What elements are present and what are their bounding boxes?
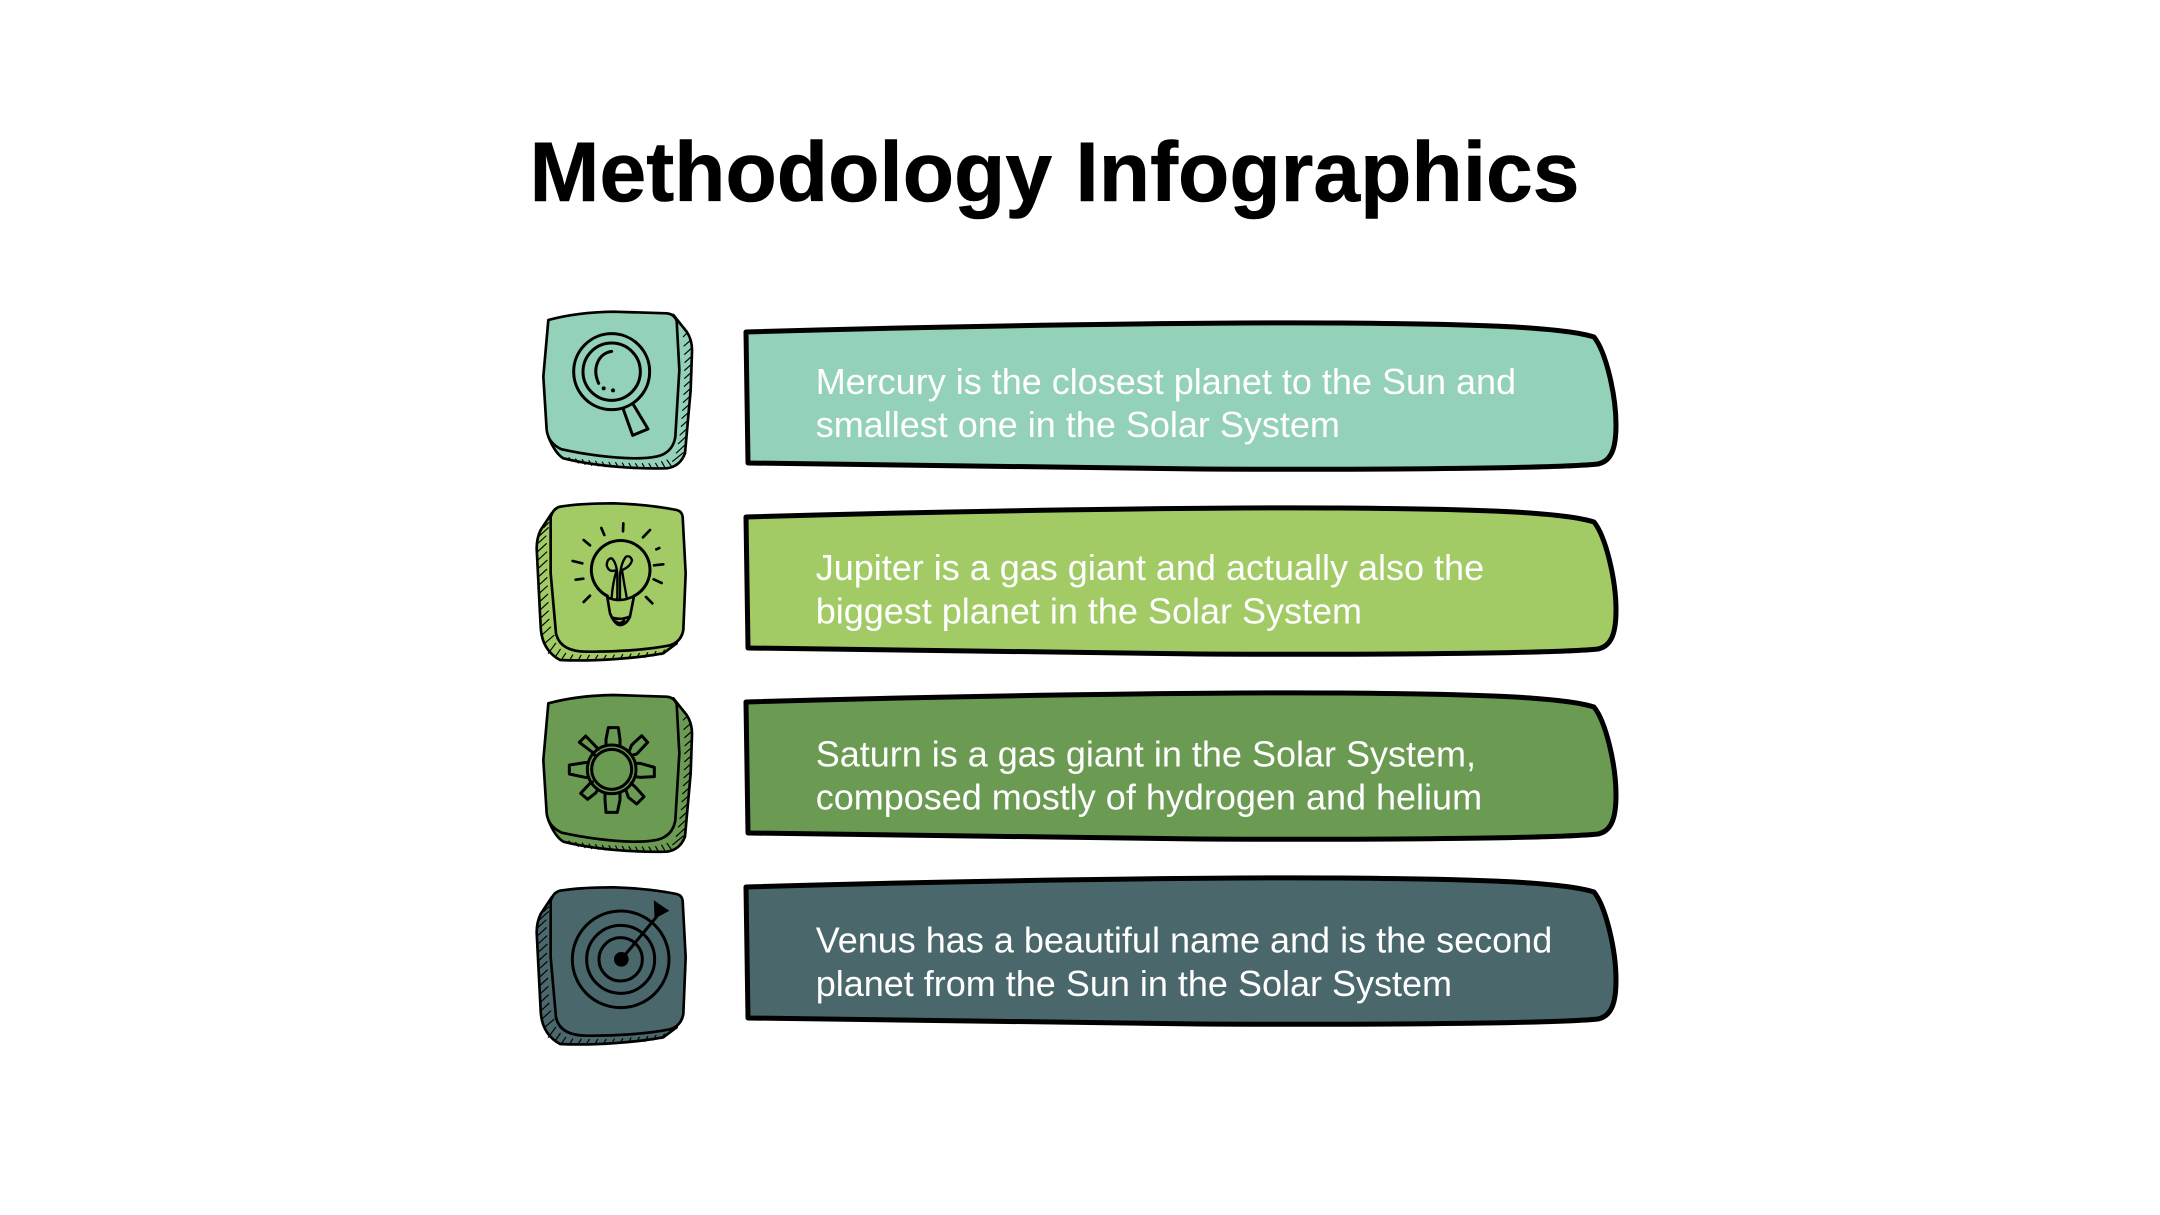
banner: saturn bbox=[746, 693, 1616, 839]
banner: saturn: composed mostly of hydrogen and helium bbox=[816, 777, 1482, 818]
icon: magnifying glass tile bbox=[543, 312, 692, 468]
icon: light bulb tile bbox=[537, 503, 686, 660]
banner: mercury bbox=[746, 323, 1616, 469]
banner: jupiter: biggest planet in the Solar System bbox=[816, 590, 1362, 631]
banner: venus: planet from the Sun in the Solar System bbox=[816, 963, 1452, 1004]
banner: jupiter: Jupiter is a gas giant and actually also the bbox=[816, 547, 1484, 588]
banner: venus: Venus has a beautiful name and is the second bbox=[816, 920, 1552, 961]
icon: target tile bbox=[537, 887, 686, 1044]
panel: mercury row bbox=[543, 312, 1616, 469]
banner: mercury: Mercury is the closest planet to the Sun and bbox=[816, 361, 1516, 402]
panel: venus row bbox=[537, 878, 1616, 1044]
banner: venus bbox=[746, 878, 1616, 1024]
banner: saturn: Saturn is a gas giant in the Solar System, bbox=[816, 733, 1476, 774]
panel: jupiter row bbox=[537, 503, 1616, 660]
title: Methodology Infographics bbox=[530, 125, 1579, 219]
banner: mercury: smallest one in the Solar System bbox=[816, 404, 1340, 445]
icon: gear tile bbox=[543, 695, 692, 852]
banner: jupiter bbox=[746, 508, 1616, 654]
panel: saturn row bbox=[543, 693, 1616, 852]
